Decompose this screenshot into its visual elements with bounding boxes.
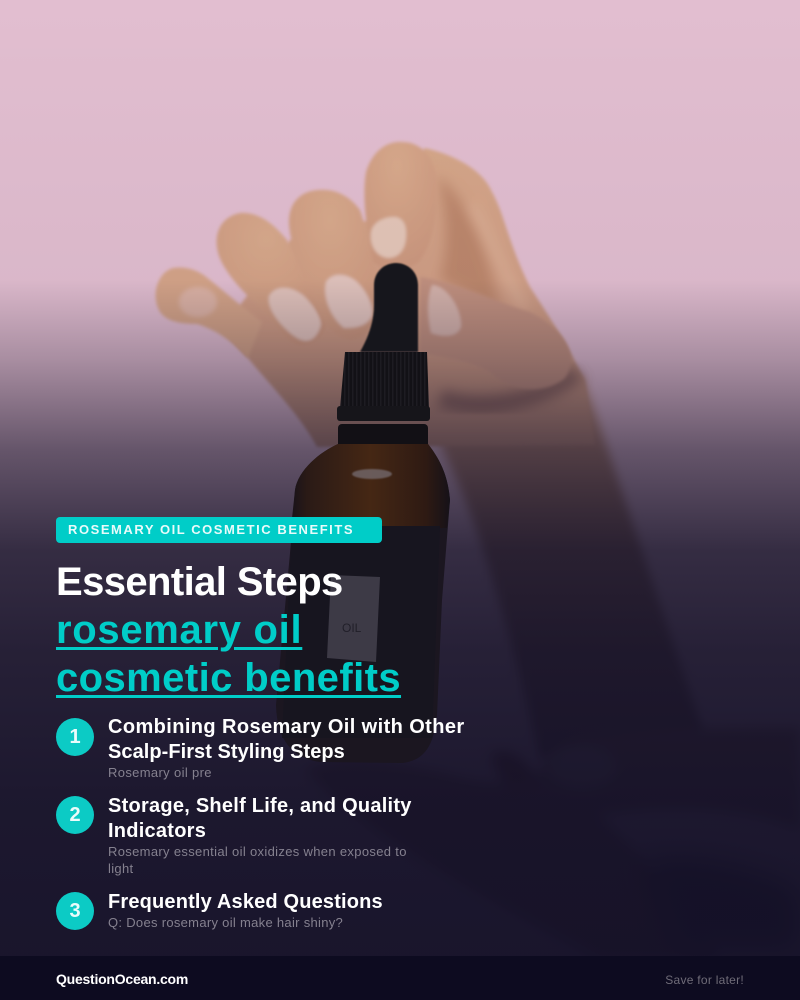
title line 3: cosmetic benefits xyxy=(56,656,401,700)
step 2 heading: Indicators xyxy=(108,820,206,842)
dropper bulb xyxy=(360,263,418,352)
cap ring xyxy=(337,406,430,421)
glass highlight xyxy=(352,469,392,479)
step 2 xyxy=(56,795,412,876)
step 3 heading: Frequently Asked Questions xyxy=(108,891,383,913)
step 3 number xyxy=(56,892,94,930)
step 2 text xyxy=(108,844,407,876)
step 2 heading xyxy=(108,795,412,842)
title xyxy=(56,560,402,700)
title line 2: rosemary oil xyxy=(56,608,302,652)
amber area xyxy=(291,444,450,528)
step 2 heading: Storage, Shelf Life, and Quality xyxy=(108,795,412,817)
step 1 xyxy=(56,716,465,780)
forearm xyxy=(440,375,705,760)
step 3 xyxy=(56,891,383,930)
step 2 text: Rosemary essential oil oxidizes when exposed to xyxy=(108,844,407,859)
neck xyxy=(338,424,428,448)
label text: OIL xyxy=(342,621,362,635)
step 1 heading xyxy=(108,716,465,763)
save note: Save for later! xyxy=(665,973,744,987)
site name: QuestionOcean.com xyxy=(56,971,188,987)
ring finger xyxy=(217,213,327,345)
index finger xyxy=(364,142,437,270)
step 2 text: light xyxy=(108,861,134,876)
step 1 text: Rosemary oil pre xyxy=(108,765,212,780)
glass body xyxy=(276,444,450,763)
pinky finger xyxy=(156,267,262,358)
cap xyxy=(340,352,429,408)
lower hand xyxy=(305,728,800,960)
title line 1: Essential Steps xyxy=(56,560,343,604)
palm xyxy=(220,148,595,447)
badge: ROSEMARY OIL COSMETIC BENEFITS xyxy=(68,522,354,537)
step 1 number: 1 xyxy=(69,726,81,748)
step 1 heading: Combining Rosemary Oil with Other xyxy=(108,716,465,738)
middle finger xyxy=(289,190,380,340)
step 1 heading: Scalp-First Styling Steps xyxy=(108,741,345,763)
white label xyxy=(327,575,380,662)
step 1 number xyxy=(56,718,94,756)
black label xyxy=(282,526,440,738)
step 3 text: Q: Does rosemary oil make hair shiny? xyxy=(108,915,343,930)
footer xyxy=(0,956,800,1000)
step 3 number: 3 xyxy=(69,900,81,922)
thumb xyxy=(420,277,571,389)
step 2 number xyxy=(56,796,94,834)
step 2 number: 2 xyxy=(69,804,81,826)
badge xyxy=(56,517,382,543)
